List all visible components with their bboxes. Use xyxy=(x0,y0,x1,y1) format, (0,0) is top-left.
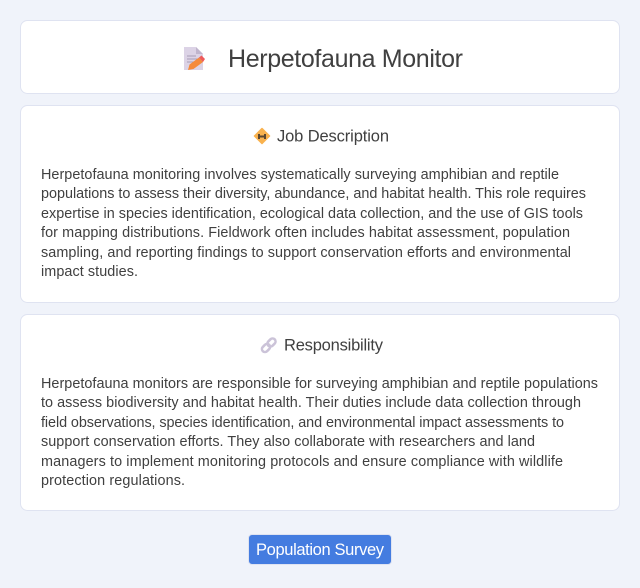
text block: responsibility: Herpetofauna monitors are responsible for surveying amphibian and reptile populations xyxy=(41,376,598,392)
heading: responsibility: Responsibility xyxy=(284,336,384,354)
text block: responsibility xyxy=(41,376,598,489)
text block: job description: impact studies. xyxy=(41,264,138,280)
icon: document with pencil xyxy=(184,47,205,70)
text block: job description: for mapping distributions. Fieldwork often includes habitat assessment, population xyxy=(41,225,570,241)
icon: chain link xyxy=(261,337,277,353)
panel: responsibility xyxy=(20,314,620,510)
text block: job description: expertise in species identification, ecological data collection, and the use of GIS tools xyxy=(41,206,583,222)
text block: job description: populations to assess their diversity, abundance, and habitat health. This role requires xyxy=(41,186,586,202)
text block: job description: Herpetofauna monitoring involves systematically surveying amphibian and reptile xyxy=(41,167,559,183)
text block: job description: sampling, and reporting findings to support conservation efforts and environmental xyxy=(41,245,571,261)
panel: job description xyxy=(20,106,620,302)
text block: job description xyxy=(41,167,586,280)
text block: responsibility: to assess biodiversity and habitat health. Their duties include data collection through xyxy=(41,395,581,411)
text block: responsibility: protection regulations. xyxy=(41,473,185,489)
text block: responsibility: managers to implement monitoring protocols and ensure compliance with wildlife xyxy=(41,454,563,470)
button: population survey xyxy=(248,534,392,564)
text block: responsibility: support conservation efforts. They also collaborate with researchers and land xyxy=(41,434,535,450)
text block: responsibility: field observations, species identification, and environmental impact assessments to xyxy=(41,415,564,431)
icon: amber diamond sign xyxy=(254,128,270,144)
button: population survey: Population Survey xyxy=(256,541,385,559)
heading: job description: Job Description xyxy=(277,128,389,146)
title: Herpetofauna Monitor xyxy=(228,45,463,73)
panel: title header xyxy=(20,20,620,94)
